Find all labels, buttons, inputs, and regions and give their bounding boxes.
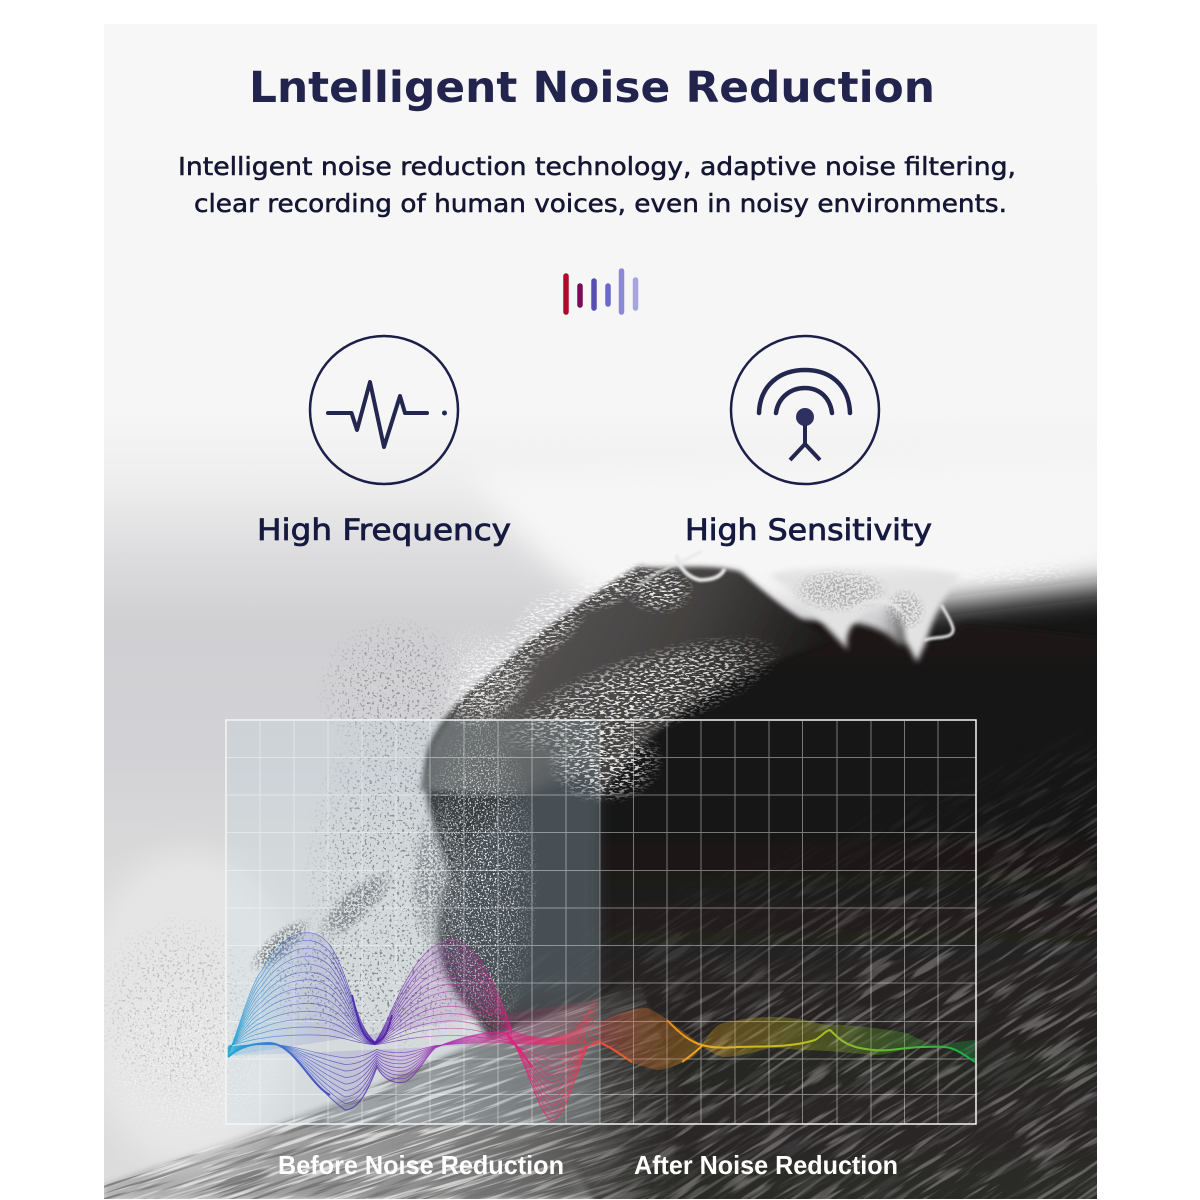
label: high frequency: High Frequency	[257, 513, 511, 547]
ocean wave photo	[80, 450, 1130, 1200]
splash strands	[640, 552, 953, 640]
chart: before/after grid	[226, 720, 976, 1124]
label: before noise reduction: Before Noise Reduction	[278, 1150, 564, 1180]
water foot streak band	[104, 987, 658, 1199]
grid lines	[226, 721, 976, 1124]
right shoulder fade	[878, 565, 1097, 648]
wave body	[425, 570, 1120, 1200]
streaks on dark water	[504, 752, 1097, 1199]
bright trace	[600, 1020, 975, 1062]
dark foam ridges	[250, 806, 469, 972]
splash fan shading	[794, 570, 925, 630]
splash top blending mist	[815, 564, 908, 578]
description text	[178, 152, 1016, 218]
label: after noise reduction: After Noise Reduction	[634, 1150, 898, 1180]
before overlay	[226, 720, 600, 1124]
waveform bright V edge	[228, 995, 532, 1095]
spray: dark droplets	[90, 615, 500, 1110]
icon: sound bars	[566, 271, 636, 312]
streaks on foot	[104, 985, 720, 1199]
icon: high frequency	[310, 336, 458, 484]
grid border	[226, 720, 976, 1124]
icon: high sensitivity	[731, 336, 879, 484]
title: Lntelligent Noise Reduction	[249, 63, 935, 113]
ribbon	[598, 1008, 975, 1070]
spray: left mist	[104, 859, 276, 1184]
description text: Intelligent noise reduction technology, adaptive noise filtering,	[178, 152, 1016, 181]
description text: clear recording of human voices, even in noisy environments.	[194, 189, 1007, 218]
spray: light foam	[112, 628, 538, 1124]
label: high sensitivity: High Sensitivity	[685, 513, 932, 547]
waveform: after noise reduction	[598, 1008, 975, 1070]
wave crest	[420, 566, 830, 800]
crest foam texture	[444, 564, 1063, 804]
splash fan	[770, 564, 960, 662]
barrel interior	[440, 770, 600, 1010]
waveform: before noise reduction	[228, 933, 598, 1120]
white splash mist behind crest	[499, 482, 1097, 610]
